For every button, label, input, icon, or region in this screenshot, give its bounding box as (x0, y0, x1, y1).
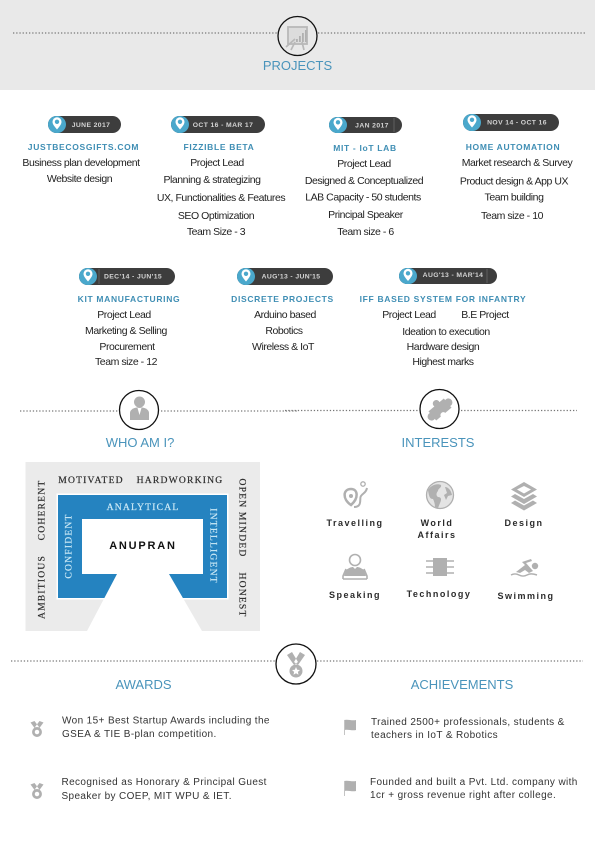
project: mit iot lab: Project Lead (337, 158, 391, 170)
project: mit iot lab: Designed & Conceptualized (305, 175, 424, 187)
award: honorary speaker (30, 777, 267, 802)
project: home automation (460, 114, 573, 222)
achievement: training: teachers in IoT & Robotics (371, 730, 498, 741)
project: iff based system: IFF BASED SYSTEM FOR INFANTRY (360, 294, 526, 304)
achievement: training: Trained 2500+ professionals, students & (371, 717, 565, 728)
project: home automation: HOME AUTOMATION (466, 142, 560, 152)
personality diagram: INTELLIGENT (208, 508, 219, 584)
project: fizzible beta: FIZZIBLE BETA (183, 142, 255, 152)
project: fizzible beta: Planning & strategizing (163, 174, 261, 186)
personality diagram: MOTIVATED (58, 475, 124, 486)
achievement: company: Founded and built a Pvt. Ltd. company with (370, 777, 578, 788)
project: mit iot lab: Team size - 6 (337, 226, 394, 238)
project: home automation: Product design & App UX (460, 176, 569, 188)
award: startup awards: Won 15+ Best Startup Awards including the (62, 716, 270, 726)
award: startup awards (30, 716, 270, 740)
project: mit iot lab: MIT - IoT LAB (333, 143, 397, 153)
project: mit iot lab (305, 117, 424, 238)
icon: medal (276, 644, 316, 684)
interest: world affairs: Affairs (417, 530, 457, 540)
project: kit manufacturing: Team size - 12 (95, 356, 158, 368)
project: justbecosgifts: Website design (47, 173, 113, 185)
project: discrete projects (231, 268, 334, 353)
project: kit manufacturing: Procurement (99, 341, 155, 353)
project: mit iot lab: JAN 2017 (355, 122, 389, 130)
divider: who am i (20, 390, 298, 430)
interest: speaking: Speaking (329, 590, 381, 600)
project: fizzible beta: Team Size - 3 (187, 226, 246, 238)
award: honorary speaker: Recognised as Honorary & Principal Guest (62, 777, 267, 788)
project: discrete projects: AUG'13 - JUN'15 (262, 274, 320, 280)
project: iff based system: Hardware design (407, 341, 480, 353)
project: iff based system: B.E Project (461, 309, 509, 321)
icon: presentation board (278, 16, 317, 56)
heading: who am i: WHO AM I? (106, 435, 174, 450)
project: home automation: NOV 14 - OCT 16 (487, 120, 547, 126)
project: kit manufacturing (78, 268, 180, 368)
project: home automation: Team building (485, 192, 544, 204)
project: kit manufacturing: Marketing & Selling (85, 325, 168, 337)
project: justbecosgifts: JUSTBECOSGIFTS.COM (28, 142, 139, 152)
personality diagram: ANUPRAN (109, 540, 177, 552)
personality diagram: ANALYTICAL (107, 502, 179, 513)
heading: awards: AWARDS (115, 677, 172, 692)
project: home automation: Team size - 10 (481, 210, 544, 222)
interest: speaking (329, 554, 381, 600)
projects header band (0, 0, 595, 90)
personality diagram: AMBITIOUS (36, 555, 47, 619)
project: justbecosgifts: JUNE 2017 (72, 122, 110, 129)
divider: interests (285, 390, 577, 428)
project: fizzible beta: SEO Optimization (178, 210, 255, 222)
project: fizzible beta: Project Lead (190, 157, 244, 169)
project: discrete projects: DISCRETE PROJECTS (231, 294, 334, 304)
personality diagram: OPEN MINDED (237, 478, 248, 558)
project: discrete projects: Wireless & IoT (252, 341, 315, 353)
project: fizzible beta: OCT 16 - MAR 17 (193, 122, 253, 129)
project: mit iot lab: LAB Capacity - 50 students (305, 192, 421, 204)
project: justbecosgifts: Business plan development (22, 157, 140, 169)
interest: travelling (326, 482, 384, 528)
project: iff based system: Project Lead (382, 309, 436, 321)
personality diagram: CONFIDENT (63, 513, 74, 579)
achievement: training (344, 717, 565, 741)
project: iff based system: Ideation to execution (402, 326, 490, 338)
icon: person (120, 390, 158, 430)
interest: swimming (497, 559, 555, 601)
interest: swimming: Swimming (497, 591, 555, 601)
heading: projects: PROJECTS (263, 58, 332, 73)
heading: achievements: ACHIEVEMENTS (411, 677, 514, 692)
project: kit manufacturing: Project Lead (97, 309, 151, 321)
project: discrete projects: Arduino based (254, 309, 317, 321)
interest: travelling: Travelling (326, 518, 384, 528)
project: fizzible beta (157, 116, 285, 238)
project: justbecosgifts (22, 116, 140, 185)
personality diagram: COHERENT (36, 480, 47, 540)
interest: design: Design (504, 518, 544, 528)
icon: puzzle piece (420, 390, 459, 428)
project: iff based system: AUG'13 - MAR'14 (423, 272, 483, 279)
interest: world affairs (417, 482, 457, 540)
divider: awards (11, 644, 583, 684)
project: kit manufacturing: DEC'14 - JUN'15 (104, 274, 162, 280)
award: honorary speaker: Speaker by COEP, MIT WPU & IET. (62, 791, 232, 802)
project: discrete projects: Robotics (265, 325, 303, 337)
interest: technology (407, 558, 471, 599)
achievement: company (344, 777, 578, 801)
heading: interests: INTERESTS (402, 435, 475, 450)
project: kit manufacturing: KIT MANUFACTURING (78, 294, 180, 304)
achievement: company: 1cr + gross revenue right after college. (370, 790, 556, 801)
personality diagram (26, 462, 260, 631)
project: home automation: Market research & Survey (462, 157, 573, 169)
award: startup awards: GSEA & TIE B-plan competition. (62, 729, 217, 740)
interest: world affairs: World (421, 518, 453, 528)
project: iff based system: Highest marks (412, 356, 474, 368)
project: iff based system (360, 268, 526, 368)
project: mit iot lab: Principal Speaker (328, 209, 404, 221)
personality diagram: HONEST (237, 572, 248, 618)
interest: design (504, 482, 544, 528)
project: fizzible beta: UX, Functionalities & Features (157, 192, 285, 204)
personality diagram: HARDWORKING (137, 475, 223, 486)
interest: technology: Technology (407, 589, 471, 599)
